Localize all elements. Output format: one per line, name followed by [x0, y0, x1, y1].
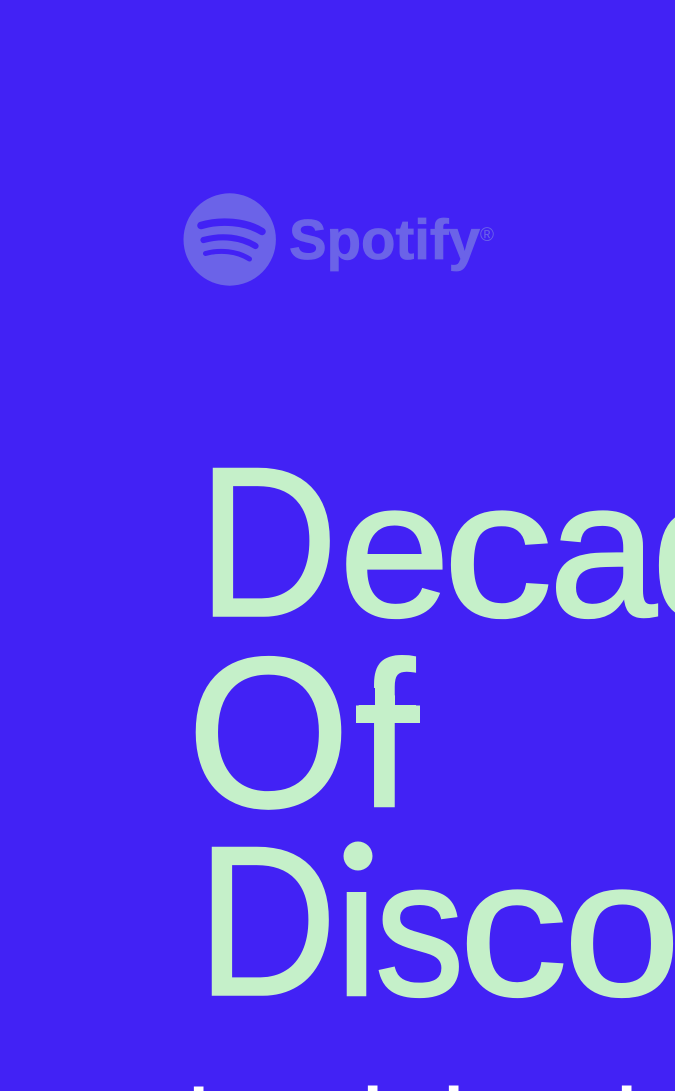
title	[187, 424, 675, 1041]
wordmark: Spotify: Spotify	[289, 208, 480, 272]
logo: Spotify	[184, 193, 494, 286]
title line: Discovery: i	[335, 820, 378, 1037]
title line: Decade	[198, 424, 675, 662]
title line: Decade: e	[339, 441, 450, 657]
title line: Of	[187, 613, 425, 852]
title line: Of: O	[187, 613, 350, 852]
registered mark: ®	[480, 225, 494, 246]
title line: Decade: a	[549, 441, 657, 658]
title detail: round dot on the letter i	[341, 835, 375, 892]
title line: Discovery: c	[459, 820, 568, 1036]
title line: Discovery: s	[375, 819, 464, 1037]
title line: Of: f	[357, 619, 415, 850]
title line: Decade: D	[198, 424, 338, 662]
icon: Spotify sound waves circle	[184, 193, 276, 286]
title line: Decade: c	[443, 441, 553, 657]
title line: Discovery: D	[197, 803, 337, 1041]
title line: Discovery	[197, 803, 675, 1041]
